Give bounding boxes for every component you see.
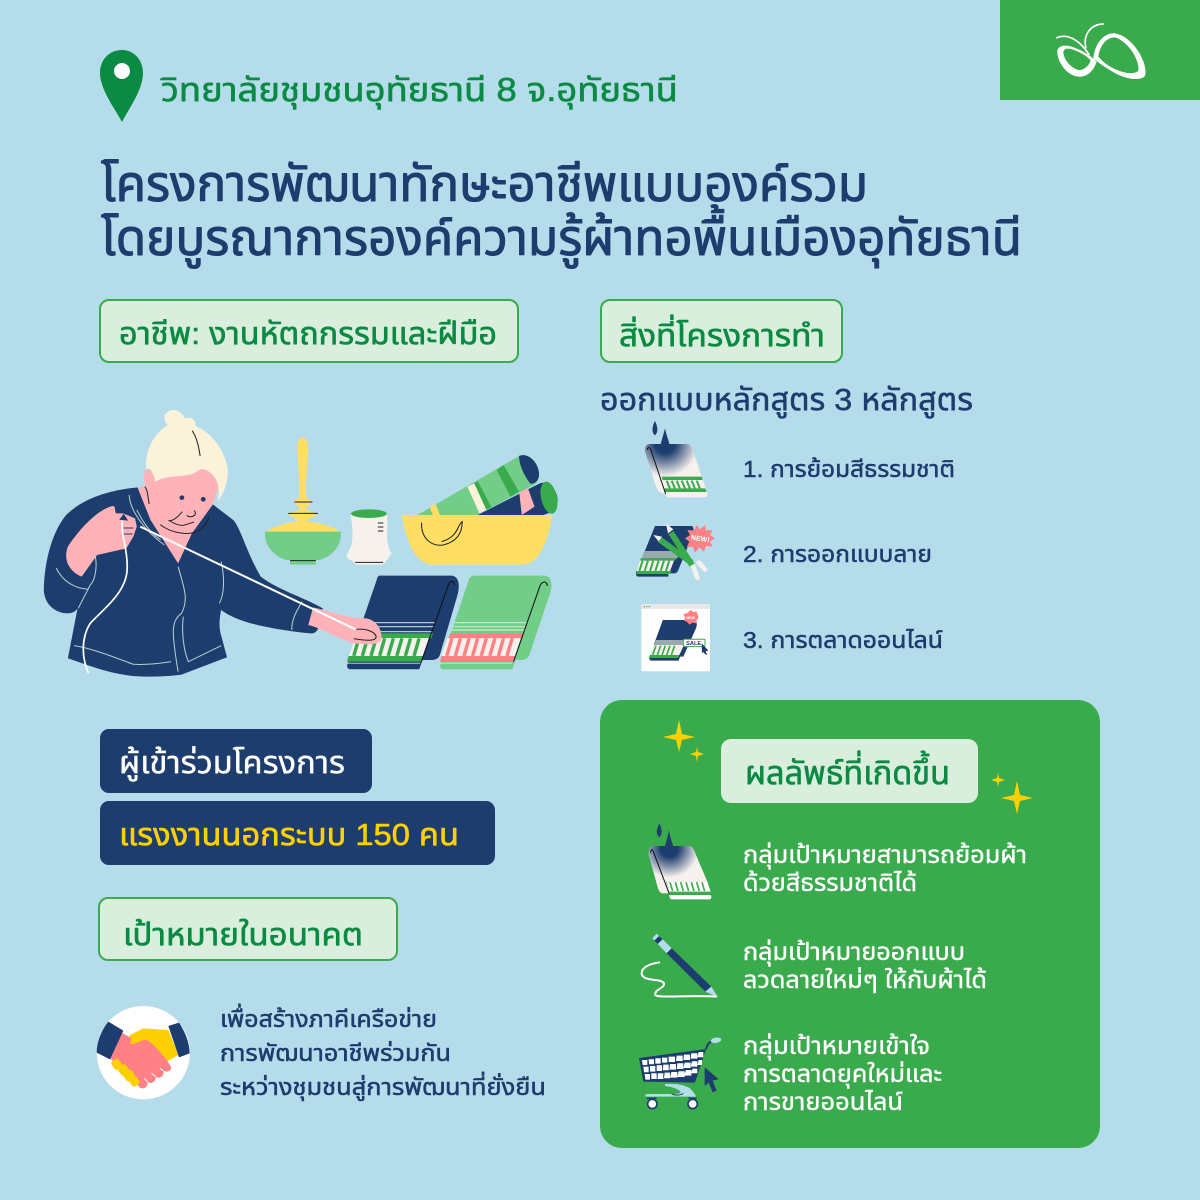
fabric rolls bbox=[417, 455, 560, 515]
folded navy textile bbox=[347, 576, 459, 669]
icon: handshake bbox=[97, 1006, 190, 1099]
heading: occupation bbox=[100, 300, 518, 362]
figure: face bbox=[145, 487, 209, 533]
figure: neck and head bbox=[137, 467, 219, 563]
heading: occupation: อาชีพ: งานหัตถกรรมและฝีมือ bbox=[119, 316, 497, 351]
figure: jacket bbox=[44, 487, 323, 677]
heading: future goal: เป้าหมายในอนาคต bbox=[123, 917, 363, 952]
goal description bbox=[220, 1003, 546, 1102]
subheading: three courses: ออกแบบหลักสูตร 3 หลักสูตร bbox=[600, 382, 973, 418]
result 3 text bbox=[743, 1032, 942, 1116]
participants label: ผู้เข้าร่วมโครงการ bbox=[119, 745, 345, 781]
figure: jacket seams bbox=[56, 495, 302, 672]
heading: what the project does bbox=[601, 300, 842, 362]
participants label bbox=[100, 729, 372, 793]
figure: thread bbox=[83, 521, 355, 673]
ceramic jar bbox=[347, 509, 392, 565]
goal description: เพื่อสร้างภาคีเครือข่าย bbox=[220, 1003, 437, 1032]
icon: shopping cart bbox=[639, 1037, 722, 1109]
yellow basket bbox=[402, 515, 552, 565]
icon: new pattern design bbox=[636, 523, 715, 578]
heading: future goal bbox=[99, 898, 397, 960]
panel: results bbox=[600, 700, 1100, 1148]
icon: natural dye textile bbox=[645, 421, 707, 497]
title: โครงการพัฒนาทักษะอาชีพแบบองค์รวม bbox=[101, 156, 868, 212]
course 1 label: 1. การย้อมสีธรรมชาติ bbox=[743, 456, 955, 482]
brass lamp bbox=[265, 437, 341, 565]
icon: new pattern design: NEW! bbox=[690, 535, 710, 544]
icon: online marketing: SALE bbox=[686, 641, 701, 647]
figure: reaching hand bbox=[308, 607, 382, 644]
result 2 text: ลวดลายใหม่ๆ ให้กับผ้าได้ bbox=[743, 966, 987, 994]
heading: what the project does: สิ่งที่โครงการทำ bbox=[619, 314, 825, 353]
result 2 text bbox=[743, 938, 987, 994]
icon: sparkles right bbox=[991, 773, 1033, 814]
result 1 text bbox=[743, 841, 1027, 897]
icon: dyed textile bbox=[649, 823, 711, 899]
result 1 text: กลุ่มเป้าหมายสามารถย้อมผ้า bbox=[743, 841, 1027, 870]
goal description: การพัฒนาอาชีพร่วมกัน bbox=[220, 1040, 451, 1066]
figure: hair bbox=[146, 410, 228, 502]
results heading: ผลลัพธ์ที่เกิดขึ้น bbox=[745, 750, 950, 791]
result 3 text: การตลาดยุคใหม่และ bbox=[743, 1060, 942, 1089]
folded green textile bbox=[440, 576, 551, 669]
result 3 text: กลุ่มเป้าหมายเข้าใจ bbox=[743, 1032, 930, 1061]
icon: online marketing bbox=[641, 604, 710, 671]
icon: online marketing: NEW! bbox=[686, 616, 695, 620]
icon: location pin bbox=[100, 50, 143, 122]
icon: sparkles left bbox=[663, 720, 704, 762]
illustration: weaver with textiles bbox=[44, 410, 560, 677]
figure: raised hand bbox=[66, 506, 137, 577]
result 3 text: การขายออนไลน์ bbox=[743, 1089, 903, 1116]
title bbox=[101, 156, 1022, 268]
result 1 text: ด้วยสีธรรมชาติได้ bbox=[743, 870, 917, 897]
participants count bbox=[100, 801, 495, 865]
location heading: วิทยาลัยชุมชนอุทัยธานี 8 จ.อุทัยธานี bbox=[161, 71, 678, 110]
logo badge bbox=[1000, 0, 1200, 100]
course 3 label: 3. การตลาดออนไลน์ bbox=[743, 627, 943, 653]
title: โดยบูรณาการองค์ความรู้ผ้าทอพื้นเมืองอุทัยธานี bbox=[101, 204, 1022, 268]
goal description: ระหว่างชุมชนสู่การพัฒนาที่ยั่งยืน bbox=[220, 1071, 546, 1102]
icon: pen and line bbox=[642, 934, 718, 997]
course 2 label: 2. การออกแบบลาย bbox=[743, 541, 932, 567]
participants count: แรงงานนอกระบบ 150 คน bbox=[119, 817, 459, 852]
results heading bbox=[721, 739, 978, 803]
result 2 text: กลุ่มเป้าหมายออกแบบ bbox=[743, 938, 965, 967]
